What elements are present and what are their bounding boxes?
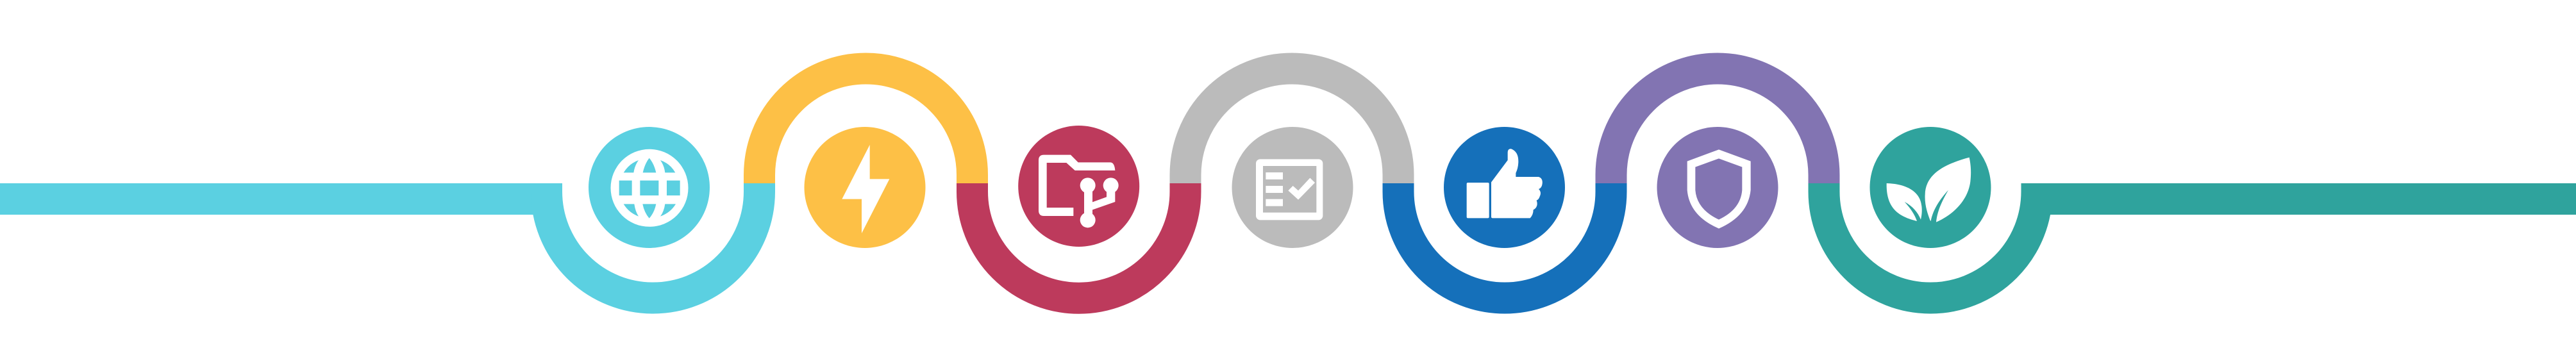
icon: lightning bolt in yellow circle xyxy=(804,127,926,248)
path segment: blue arc xyxy=(1398,183,1611,298)
path segment: purple arc xyxy=(1611,69,1824,183)
path segment: teal lower arc and exit strip xyxy=(1824,183,2576,298)
icon: globe in cyan circle xyxy=(589,127,710,248)
path segment: gray arc xyxy=(1185,69,1398,183)
icon: checklist in gray circle xyxy=(1232,127,1353,248)
icon: shield in purple circle xyxy=(1657,127,1778,248)
path segment: yellow arc xyxy=(759,69,972,183)
path segment: cyan lead-in strip and lower arc xyxy=(0,183,759,298)
icon: sprout leaves in teal circle xyxy=(1869,127,1991,248)
icon: folder with branch in crimson circle xyxy=(1018,126,1139,247)
path segment: crimson arc xyxy=(972,183,1185,298)
icon: thumbs up in blue circle xyxy=(1444,127,1565,248)
